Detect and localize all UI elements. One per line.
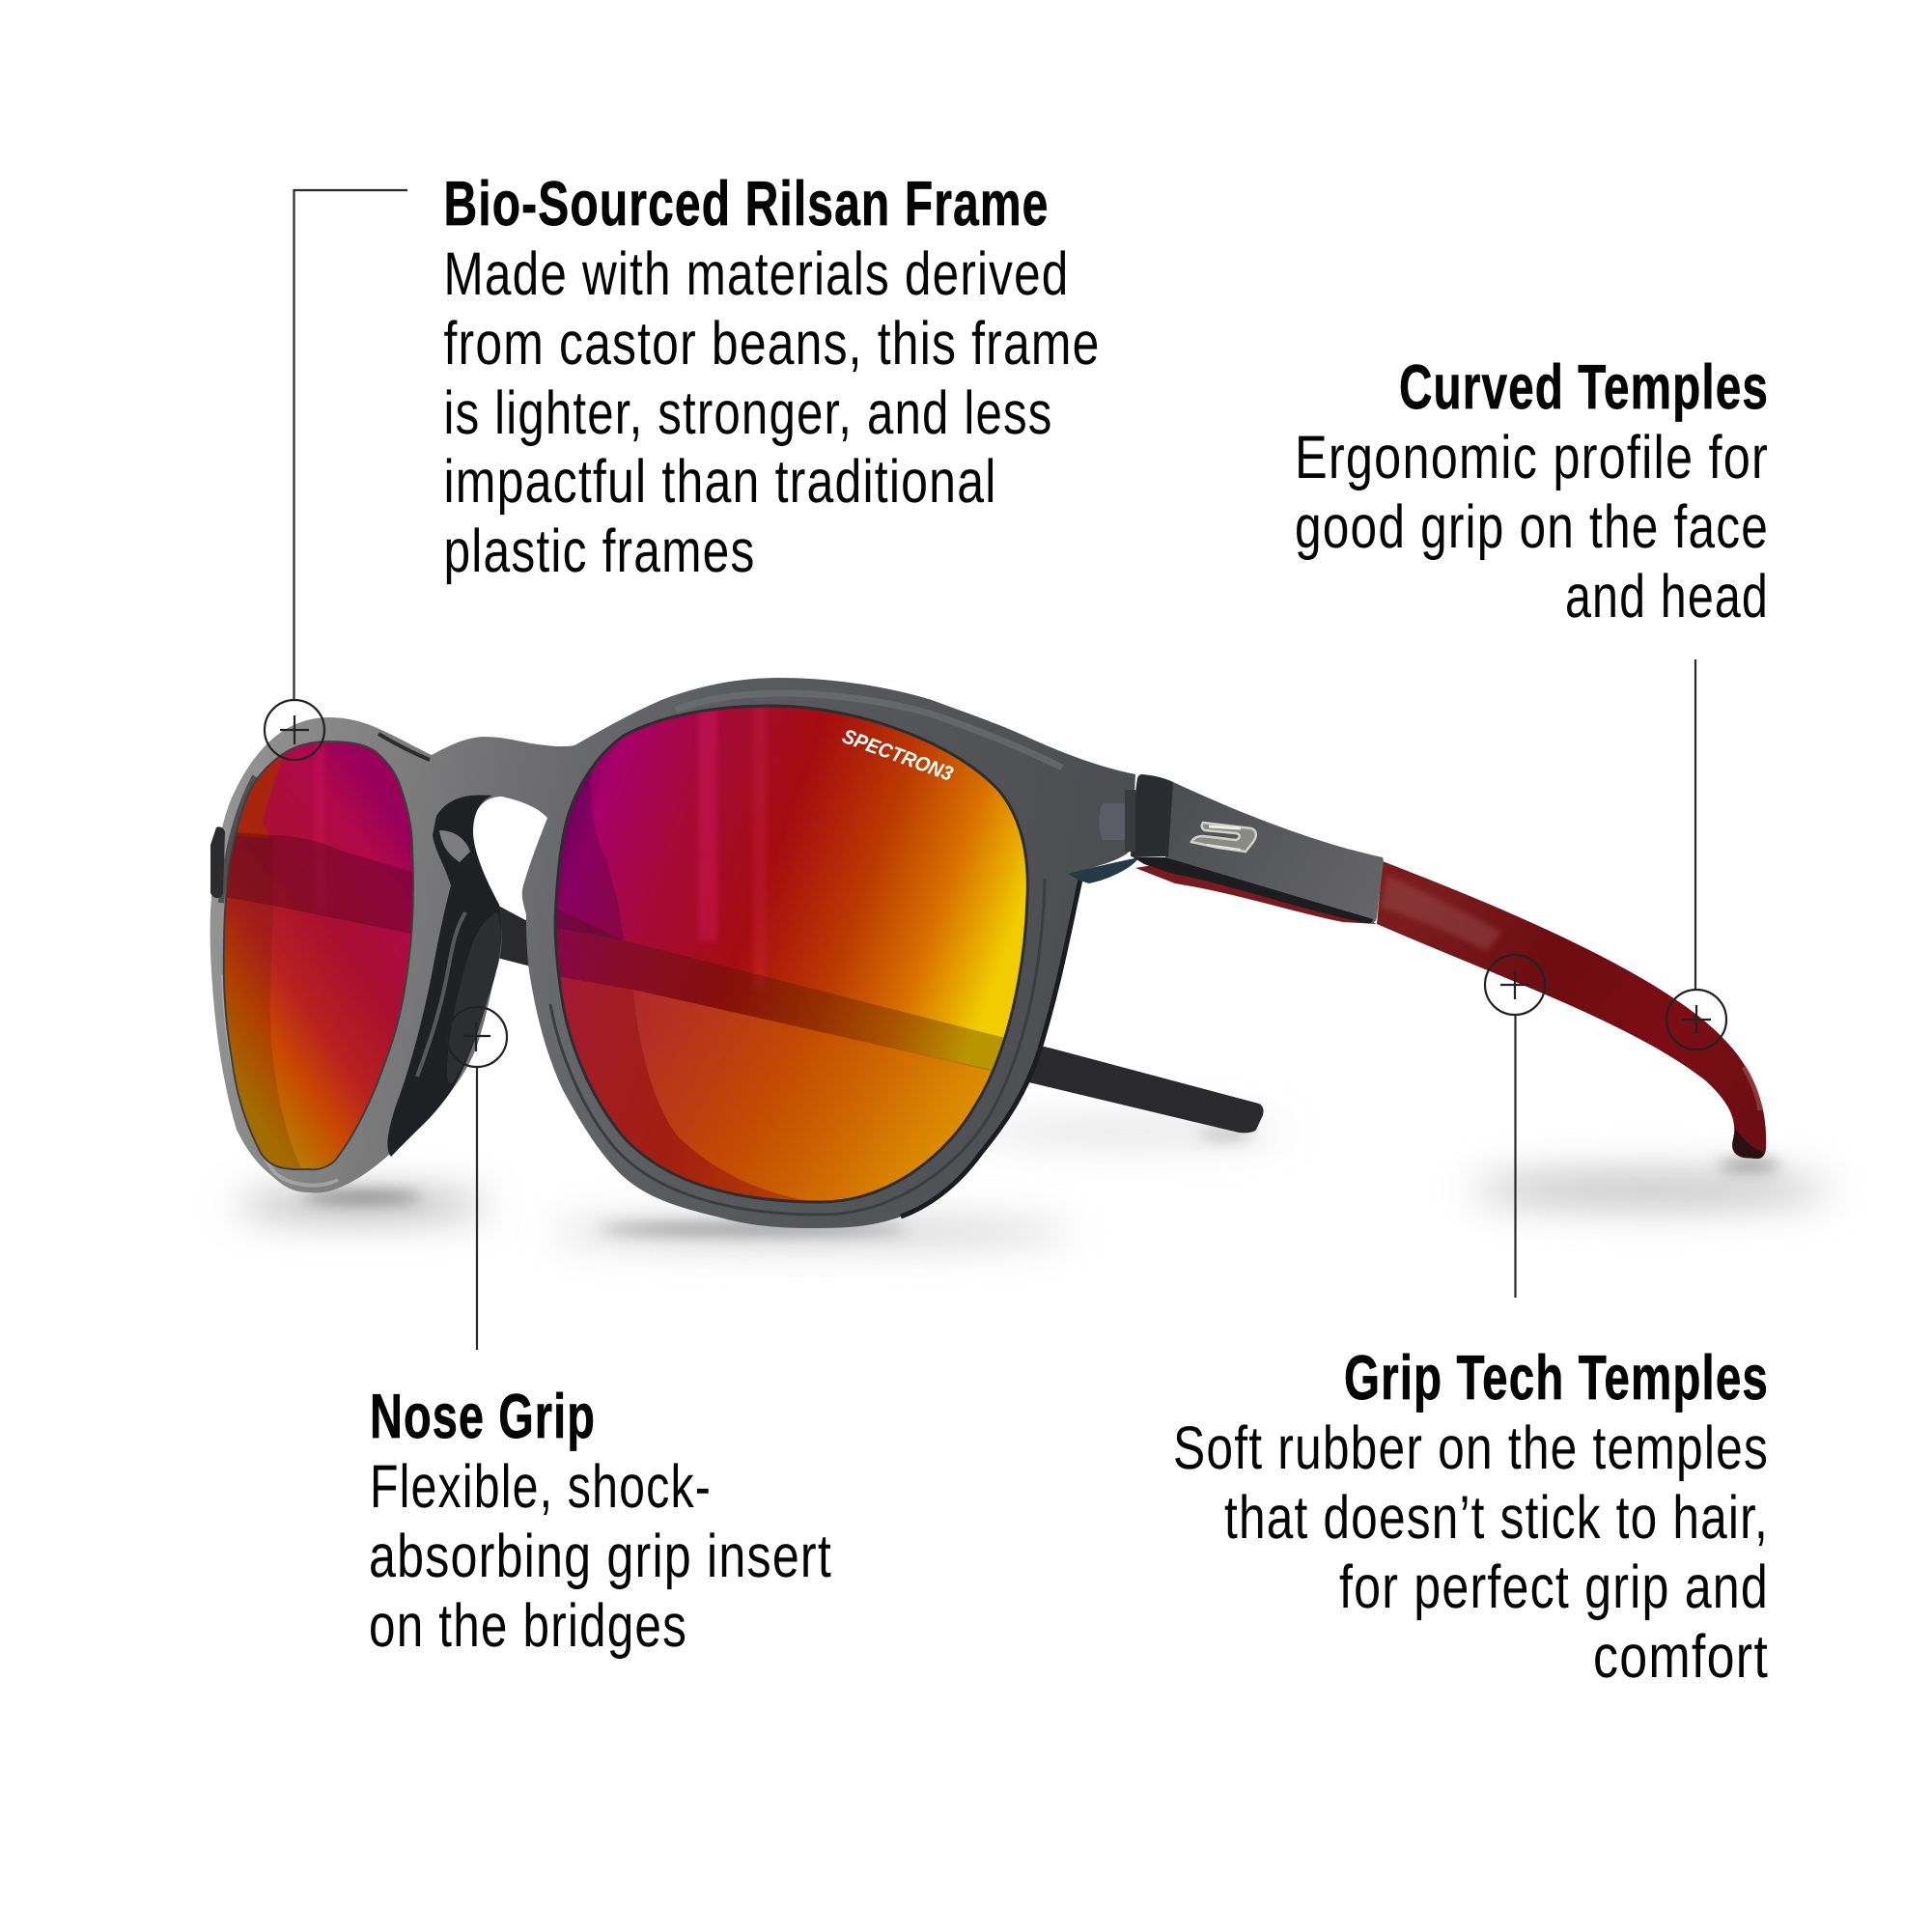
description: Flexible, shock- bbox=[370, 1453, 712, 1521]
description: impactful than traditional bbox=[444, 448, 996, 516]
temple tip end bbox=[1732, 1128, 1764, 1159]
right lower frame edge bbox=[901, 871, 1082, 1217]
grey rubber sleeve bbox=[1165, 782, 1384, 923]
description: plastic frames bbox=[444, 518, 755, 585]
description bbox=[444, 240, 1101, 585]
left frame dark side band bbox=[221, 776, 255, 903]
nose insert lower gloss bbox=[417, 912, 465, 1077]
description: Soft rubber on the temples bbox=[1173, 1414, 1769, 1482]
description: on the bridges bbox=[369, 1592, 687, 1660]
description: is lighter, stronger, and less bbox=[444, 379, 1052, 447]
left lens bbox=[224, 742, 412, 1168]
callout: nose grip bbox=[369, 1007, 832, 1660]
leader line bbox=[1694, 659, 1696, 990]
top-left ridge bbox=[378, 734, 430, 760]
marker bbox=[447, 1007, 507, 1067]
right lens rim bbox=[555, 706, 1027, 1202]
heading: Curved Temples bbox=[1399, 351, 1769, 422]
leader line bbox=[1514, 1015, 1517, 1298]
hinge tab on frame bbox=[1099, 803, 1126, 840]
description: absorbing grip insert bbox=[369, 1523, 832, 1590]
text block bbox=[444, 168, 1101, 585]
text block bbox=[1173, 1342, 1769, 1691]
marker bbox=[1485, 955, 1545, 1015]
marker bbox=[1666, 990, 1726, 1050]
callout: curved temples bbox=[1295, 351, 1769, 1050]
dark lower strip of sleeve bbox=[1132, 856, 1373, 924]
left lens rim bbox=[224, 742, 413, 1169]
big frame inner ring bbox=[550, 879, 1045, 1215]
description: comfort bbox=[1593, 1623, 1769, 1691]
text block bbox=[1295, 351, 1769, 630]
logo emblem bbox=[1191, 823, 1256, 852]
description: Ergonomic profile for bbox=[1295, 424, 1769, 491]
hinge block bbox=[1131, 774, 1173, 856]
left side hinge bbox=[210, 826, 225, 898]
temple gloss near tip bbox=[1744, 1067, 1760, 1110]
leader line bbox=[294, 190, 407, 700]
heading: Grip Tech Temples bbox=[1344, 1342, 1769, 1413]
left frame bottom ring bbox=[223, 975, 338, 1186]
front frame bbox=[210, 678, 1135, 1228]
nose bridge dark insert bbox=[387, 795, 502, 1157]
top frame shine bbox=[676, 693, 1062, 768]
description: for perfect grip and bbox=[1339, 1554, 1769, 1621]
red under-piece of temple bbox=[1135, 859, 1377, 924]
callout: grip tech temples bbox=[1173, 955, 1769, 1691]
description: good grip on the face bbox=[1295, 493, 1769, 561]
inner hinge reflection bbox=[1068, 857, 1139, 883]
description bbox=[369, 1453, 832, 1660]
sunglasses illustration bbox=[210, 678, 1766, 1255]
far temple bbox=[488, 900, 1264, 1133]
marker bbox=[265, 700, 324, 760]
description: Made with materials derived bbox=[444, 240, 1070, 308]
heading: Bio-Sourced Rilsan Frame bbox=[444, 168, 1049, 238]
description: that doesn’t stick to hair, bbox=[1224, 1484, 1769, 1552]
ground shadows bbox=[237, 1124, 1830, 1242]
description: and head bbox=[1565, 563, 1769, 630]
description bbox=[1295, 424, 1769, 630]
heading: Nose Grip bbox=[370, 1381, 596, 1451]
description: from castor beans, this frame bbox=[444, 310, 1101, 378]
lens mark: SPECTRON3 bbox=[839, 725, 956, 786]
text block bbox=[369, 1381, 832, 1660]
nose grip rubber pad bbox=[447, 912, 501, 1083]
near temple red tip bbox=[1377, 861, 1766, 1159]
temple highlight bbox=[1381, 874, 1501, 951]
nose insert glossy reflections bbox=[439, 830, 470, 862]
hinge gap bbox=[1125, 790, 1135, 852]
leader line bbox=[476, 1067, 478, 1350]
description bbox=[1173, 1414, 1769, 1691]
right lens bbox=[556, 707, 1026, 1201]
callout: bio-sourced frame bbox=[265, 168, 1101, 760]
